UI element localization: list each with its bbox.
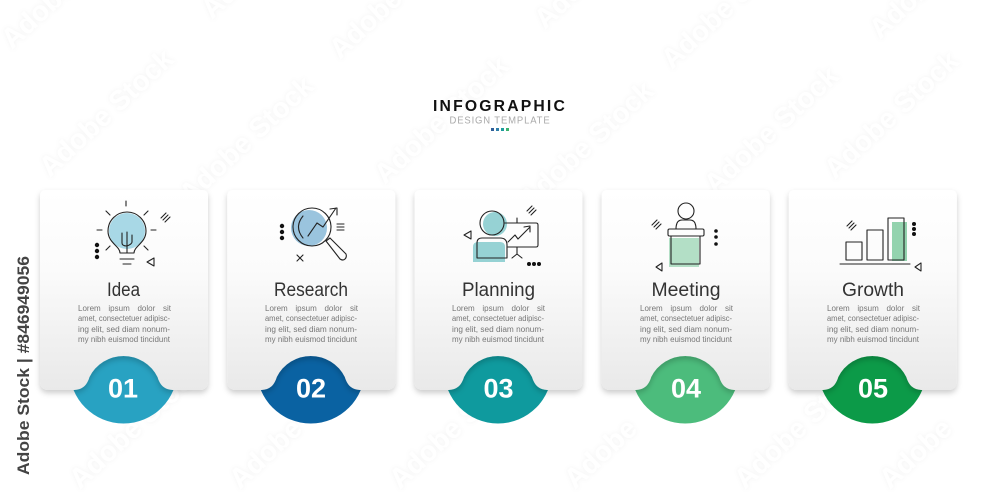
- text block: Growth: Lorem ipsum dolor sit: [827, 304, 921, 313]
- text block: Planning: ing elit, sed diam nonum-: [452, 325, 544, 334]
- heading: Idea: Idea: [107, 280, 140, 301]
- text block: Idea: Lorem ipsum dolor sit: [78, 304, 172, 313]
- icon: light bulb: [95, 201, 170, 266]
- panel: 05 Growth: [789, 190, 957, 424]
- title block: [433, 98, 567, 131]
- text block: Growth: my nibh euismod tincidunt: [827, 335, 920, 344]
- watermark pattern: Adobe: [223, 412, 308, 494]
- text block: Meeting: my nibh euismod tincidunt: [640, 335, 733, 344]
- icon: bar chart: [840, 218, 921, 271]
- panel: 01 Idea: [40, 190, 208, 424]
- icon: magnifier with chart: [280, 208, 346, 261]
- text block: Planning: [452, 304, 546, 344]
- text block: Planning: Lorem ipsum dolor sit: [452, 304, 546, 313]
- text block: Idea: amet, consectetuer adipisc-: [78, 314, 170, 323]
- icon: speaker at podium: [652, 203, 718, 271]
- watermark pattern: Adobe Stock: [383, 355, 530, 494]
- number 03: 03: [483, 374, 514, 404]
- icon: presenter with board: [464, 206, 541, 266]
- watermark pattern: Adobe Stock: [33, 43, 180, 182]
- stock id side text: Adobe Stock | #846949056: [14, 256, 33, 475]
- text block: Idea: ing elit, sed diam nonum-: [78, 325, 170, 334]
- text block: Meeting: ing elit, sed diam nonum-: [640, 325, 732, 334]
- watermark pattern: Adobe: [873, 412, 958, 494]
- number 01: 01: [108, 374, 138, 404]
- watermark pattern: Adobe Stock: [173, 70, 320, 209]
- panel: 03 Planning: [414, 190, 582, 424]
- text block: Research: [265, 304, 359, 344]
- text block: Idea: my nibh euismod tincidunt: [78, 335, 171, 344]
- text block: Planning: amet, consectetuer adipisc-: [452, 314, 544, 323]
- text block: Growth: [827, 304, 921, 344]
- panel: 02 Research: [227, 190, 395, 424]
- text block: Meeting: Lorem ipsum dolor sit: [640, 304, 734, 313]
- number 02: 02: [296, 374, 326, 404]
- watermark pattern: Adobe Stock: [368, 50, 515, 189]
- text block: Growth: amet, consectetuer adipisc-: [827, 314, 919, 323]
- text block: Idea: [78, 304, 172, 344]
- watermark pattern: Adobe Stock: [698, 60, 845, 199]
- title block: INFOGRAPHIC: [433, 98, 567, 115]
- heading: Meeting: Meeting: [652, 280, 720, 301]
- text block: Meeting: amet, consectetuer adipisc-: [640, 314, 732, 323]
- watermark pattern: Adobe Stock: [513, 75, 660, 214]
- text block: Growth: ing elit, sed diam nonum-: [827, 325, 919, 334]
- text block: Planning: my nibh euismod tincidunt: [452, 335, 545, 344]
- number 05: 05: [858, 374, 888, 404]
- heading: Growth: Growth: [842, 280, 904, 301]
- text block: Research: ing elit, sed diam nonum-: [265, 325, 357, 334]
- number 04: 04: [671, 374, 701, 404]
- text block: Research: Lorem ipsum dolor sit: [265, 304, 359, 313]
- watermark pattern: Adobe Stock: [728, 355, 875, 494]
- watermark pattern: Adobe Stock: [818, 45, 965, 184]
- heading: Research: Research: [274, 280, 348, 301]
- watermark pattern: Adobe: [558, 412, 643, 494]
- text block: Research: amet, consectetuer adipisc-: [265, 314, 357, 323]
- watermark pattern: Adobe Stock: [63, 355, 210, 494]
- title block: DESIGN TEMPLATE: [450, 116, 550, 126]
- text block: Meeting: [640, 304, 734, 344]
- heading: Planning: Planning: [462, 280, 535, 301]
- text block: Research: my nibh euismod tincidunt: [265, 335, 358, 344]
- panel: 04 Meeting: [602, 190, 770, 424]
